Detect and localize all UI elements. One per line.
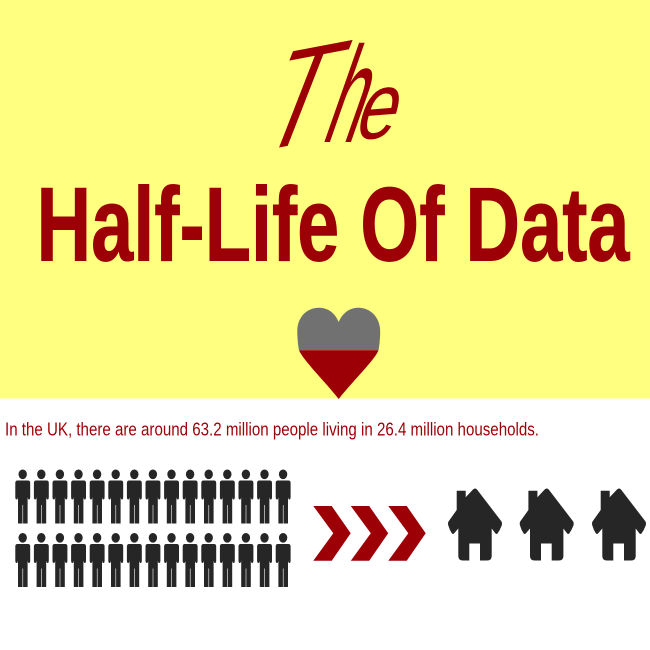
text: population statement: In the UK, there are around 63.2 million people living in 26.4 million households. — [5, 420, 539, 440]
icon group: people rows — [15, 470, 291, 587]
icon: half-full heart — [297, 308, 380, 399]
yellow header panel — [0, 0, 650, 398]
title: Half-Life Of Data: Half-Life Of Data — [36, 166, 630, 283]
arrow: three chevrons — [313, 506, 426, 561]
icon group: houses — [448, 488, 646, 560]
title: The: h — [310, 18, 398, 171]
title: The: T — [237, 7, 369, 187]
title: The: e — [346, 52, 418, 161]
